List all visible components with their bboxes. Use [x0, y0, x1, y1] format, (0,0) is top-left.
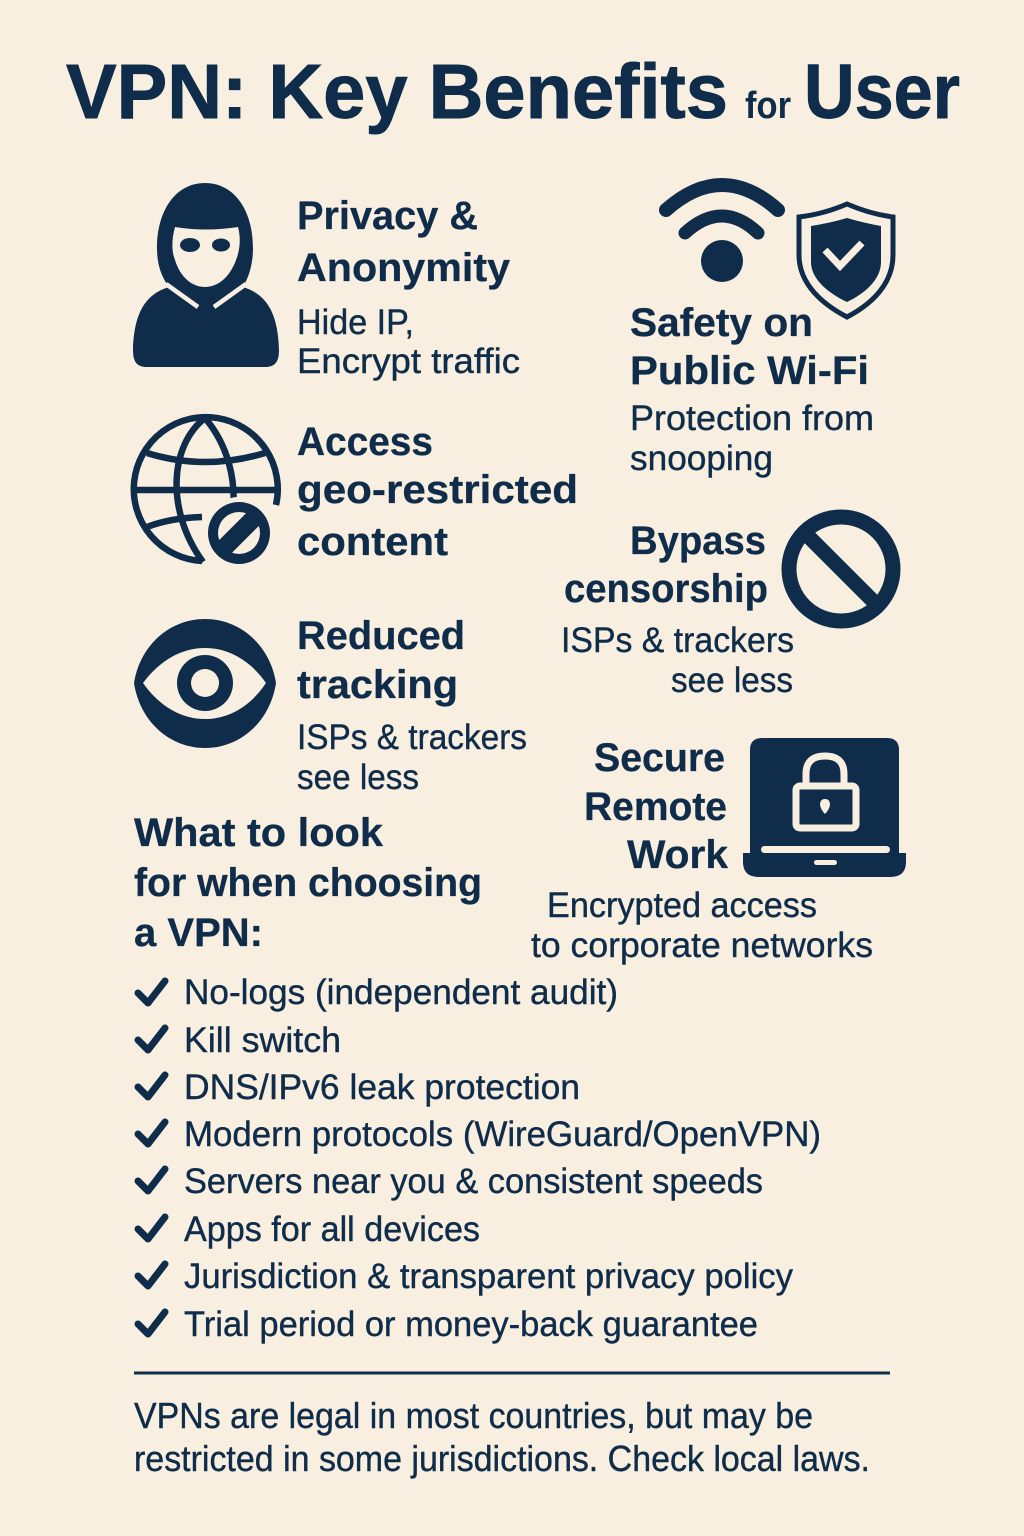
heading [584, 736, 729, 877]
description: snooping [630, 439, 773, 478]
check item: servers: Servers near you & consistent speeds [184, 1162, 763, 1201]
heading: Safety on [630, 301, 813, 345]
footer note: VPNs are legal in most countries, but may be [134, 1395, 813, 1436]
heading: a VPN: [134, 911, 263, 955]
heading: Access [297, 420, 433, 464]
description: ISPs & trackers [561, 621, 794, 660]
icon: prohibited sign [789, 517, 893, 621]
heading: Anonymity [297, 246, 511, 290]
check item: jurisdiction: Jurisdiction & transparent privacy policy [184, 1257, 793, 1296]
check item: no-logs: No-logs (independent audit) [184, 973, 618, 1012]
check item: modern protocols: Modern protocols (WireGuard/OpenVPN) [184, 1115, 821, 1154]
description [297, 718, 527, 797]
heading [297, 614, 465, 707]
heading: Privacy & [297, 194, 478, 238]
heading: Remote [584, 785, 727, 829]
panel: safety on public wi-fi [630, 185, 893, 478]
heading: Reduced [297, 614, 465, 658]
heading: Public Wi-Fi [630, 349, 869, 393]
heading: tracking [297, 663, 458, 707]
heading [297, 194, 511, 290]
description [297, 303, 520, 381]
description: see less [671, 661, 793, 700]
title: User [804, 49, 960, 135]
heading: Work [627, 833, 729, 877]
description: Encrypted access [547, 886, 817, 925]
footer note: restricted in some jurisdictions. Check local laws. [134, 1438, 870, 1479]
check item: apps: Apps for all devices [184, 1210, 480, 1249]
panel: what to look for [134, 811, 821, 1344]
description [561, 621, 794, 700]
title: VPN: Key Benefits [66, 49, 728, 135]
icon: hooded person [133, 183, 279, 367]
heading: censorship [564, 567, 768, 611]
description [630, 399, 874, 478]
panel: geo-restricted content [133, 417, 578, 569]
panel: bypass censorship [561, 517, 893, 700]
heading: What to look [134, 811, 384, 855]
icon: eye [134, 619, 276, 748]
description: to corporate networks [531, 926, 873, 965]
panel: reduced tracking [134, 614, 527, 797]
icon: laptop with padlock [743, 738, 906, 877]
check item: leak protection: DNS/IPv6 leak protection [184, 1068, 580, 1107]
check item: trial: Trial period or money-back guarantee [184, 1305, 758, 1344]
heading: for when choosing [134, 861, 482, 905]
heading [134, 811, 482, 955]
icon: shield with check [799, 204, 893, 317]
description: Protection from [630, 399, 874, 438]
description: ISPs & trackers [297, 718, 527, 757]
footer note [134, 1395, 870, 1479]
panel: privacy and anonymity [133, 183, 520, 381]
heading [297, 420, 578, 564]
description [531, 886, 873, 965]
heading: Bypass [630, 519, 766, 563]
icon: globe with block badge [133, 417, 278, 569]
icon: wi-fi signal [666, 185, 778, 282]
description: Encrypt traffic [297, 342, 520, 381]
heading: geo-restricted [297, 468, 578, 512]
panel: secure remote work [531, 736, 906, 965]
title: for [745, 85, 791, 127]
check item: kill switch: Kill switch [184, 1021, 341, 1060]
heading [630, 301, 869, 393]
heading [564, 519, 768, 611]
description: see less [297, 758, 419, 797]
heading: content [297, 520, 448, 564]
heading: Secure [594, 736, 725, 780]
description: Hide IP, [297, 303, 414, 342]
checklist [138, 973, 821, 1344]
